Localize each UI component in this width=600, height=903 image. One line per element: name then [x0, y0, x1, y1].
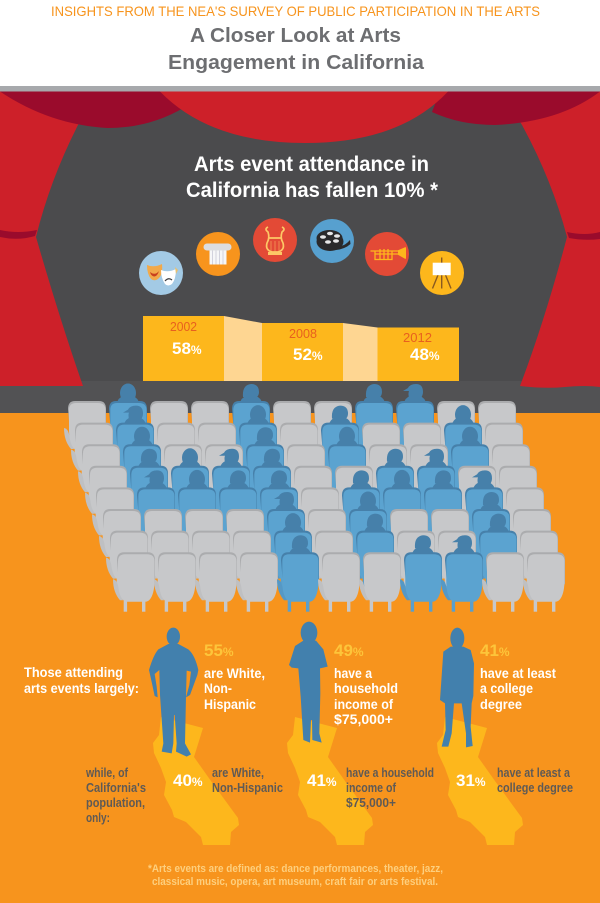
footnote — [148, 863, 443, 888]
bar 2002 — [143, 316, 224, 381]
stat: 40% population: Non-Hispanic — [212, 780, 283, 795]
footnote: *Arts events are defined as: dance performances, theater, jazz, — [148, 863, 443, 875]
stat: 41% degree — [480, 641, 556, 712]
stat: 55% white: Hispanic — [204, 696, 256, 712]
footnote: classical music, opera, art museum, craft fair or arts festival. — [152, 876, 438, 888]
stat: 41% degree: a college — [480, 680, 533, 696]
stat: 41% population income: 41% — [307, 771, 337, 790]
stat: 49% income: have a — [334, 665, 372, 681]
headline: California has fallen 10% * — [186, 179, 439, 202]
header — [0, 0, 600, 92]
title — [168, 25, 425, 74]
icon: column — [196, 232, 240, 276]
stat: 49% income: household — [334, 680, 398, 696]
subtitle: INSIGHTS FROM THE NEA'S SURVEY OF PUBLIC PARTICIPATION IN THE ARTS — [51, 3, 540, 19]
seat row 1 — [64, 384, 516, 460]
silhouette: man — [149, 628, 198, 757]
left dark valance — [0, 92, 185, 128]
left curtain tie — [0, 230, 37, 239]
bar 2012: 2012 — [403, 330, 432, 345]
connector 2008 to 2012 — [343, 323, 378, 381]
left curtain — [0, 92, 100, 386]
california map: race — [153, 717, 239, 845]
stat: 41% degree: have at least — [480, 665, 556, 681]
title: Engagement in California — [168, 52, 425, 74]
curtains — [0, 92, 600, 388]
stat: 49% income: 49% — [334, 641, 364, 660]
stat: 55% white — [204, 641, 265, 712]
text: while, of California's population: only: — [86, 810, 110, 825]
stat: 55% white: 55% — [204, 641, 234, 660]
text: while, of California's population: while, of — [85, 765, 129, 780]
icon: theatre masks — [139, 251, 183, 295]
stat: 31% population degree: have at least a — [497, 765, 571, 780]
text: while, of California's population — [85, 765, 146, 825]
bar 2012: 48% — [410, 345, 440, 364]
stat: 41% population income: have a household — [346, 765, 434, 780]
seat row 7 — [106, 513, 558, 590]
seat row 3 — [78, 427, 530, 504]
right curtain tie — [567, 232, 600, 240]
bar 2002: 2002 — [170, 319, 197, 334]
icon: easel — [420, 251, 464, 295]
title: A Closer Look at Arts — [190, 25, 401, 47]
california map: income — [287, 717, 373, 845]
seat row 8 — [113, 535, 565, 612]
theatre seating: 8 rows of 11 seats — [64, 384, 565, 612]
california map: education — [437, 717, 523, 845]
text: while, of California's population: California's — [86, 780, 146, 795]
stage — [0, 92, 600, 413]
headline — [186, 153, 439, 202]
bar 2012 — [378, 328, 459, 381]
stat: 40% population: are White, — [212, 765, 264, 780]
stat: 31% population degree: 31% — [456, 771, 486, 790]
icon: lyre — [253, 218, 297, 262]
icon: trumpet — [365, 232, 409, 276]
stat: 41% population income: $75,000+ — [346, 795, 396, 810]
right curtain — [500, 92, 600, 388]
stat: 49% income: income of — [334, 696, 393, 712]
right dark valance — [432, 92, 600, 125]
stat: 49% income — [334, 641, 398, 727]
text: while, of California's population: population, — [86, 795, 145, 810]
stat: 49% income: $75,000+ — [334, 711, 393, 727]
icon: film reel — [310, 219, 354, 263]
seat row 5 — [92, 470, 544, 547]
stat: 55% white: are White, — [204, 665, 265, 681]
bar chart: attendance by year — [143, 316, 459, 381]
stat: 40% population: 40% — [173, 771, 203, 790]
bar 2008: 2008 — [289, 326, 317, 341]
headline: Arts event attendance in — [194, 153, 429, 176]
bar 2008 — [262, 323, 343, 381]
stat: 41% population income — [307, 765, 434, 810]
stat: 41% population income: income of — [346, 780, 397, 795]
text: those attending: Those attending — [24, 664, 123, 680]
stat: 55% white: Non- — [204, 680, 232, 696]
bar 2002: 58% — [172, 339, 202, 358]
stat: 41% degree: degree — [480, 696, 522, 712]
seat row 4 — [85, 448, 537, 525]
stat: 31% population degree — [456, 765, 573, 795]
centre valance — [160, 92, 448, 143]
silhouette: woman with income — [289, 622, 328, 743]
stat: 40% population — [173, 765, 283, 795]
stat: 31% population degree: college degree — [497, 780, 573, 795]
seat row 2 — [71, 405, 523, 482]
text: those attending: arts events largely: — [24, 680, 139, 696]
connector 2002 to 2008 — [224, 316, 262, 381]
text: those attending — [24, 664, 139, 696]
bar 2008: 52% — [293, 345, 323, 364]
seat row 6 — [99, 492, 551, 568]
stat: 41% degree: 41% — [480, 641, 510, 660]
silhouette: woman with degree — [440, 628, 474, 747]
